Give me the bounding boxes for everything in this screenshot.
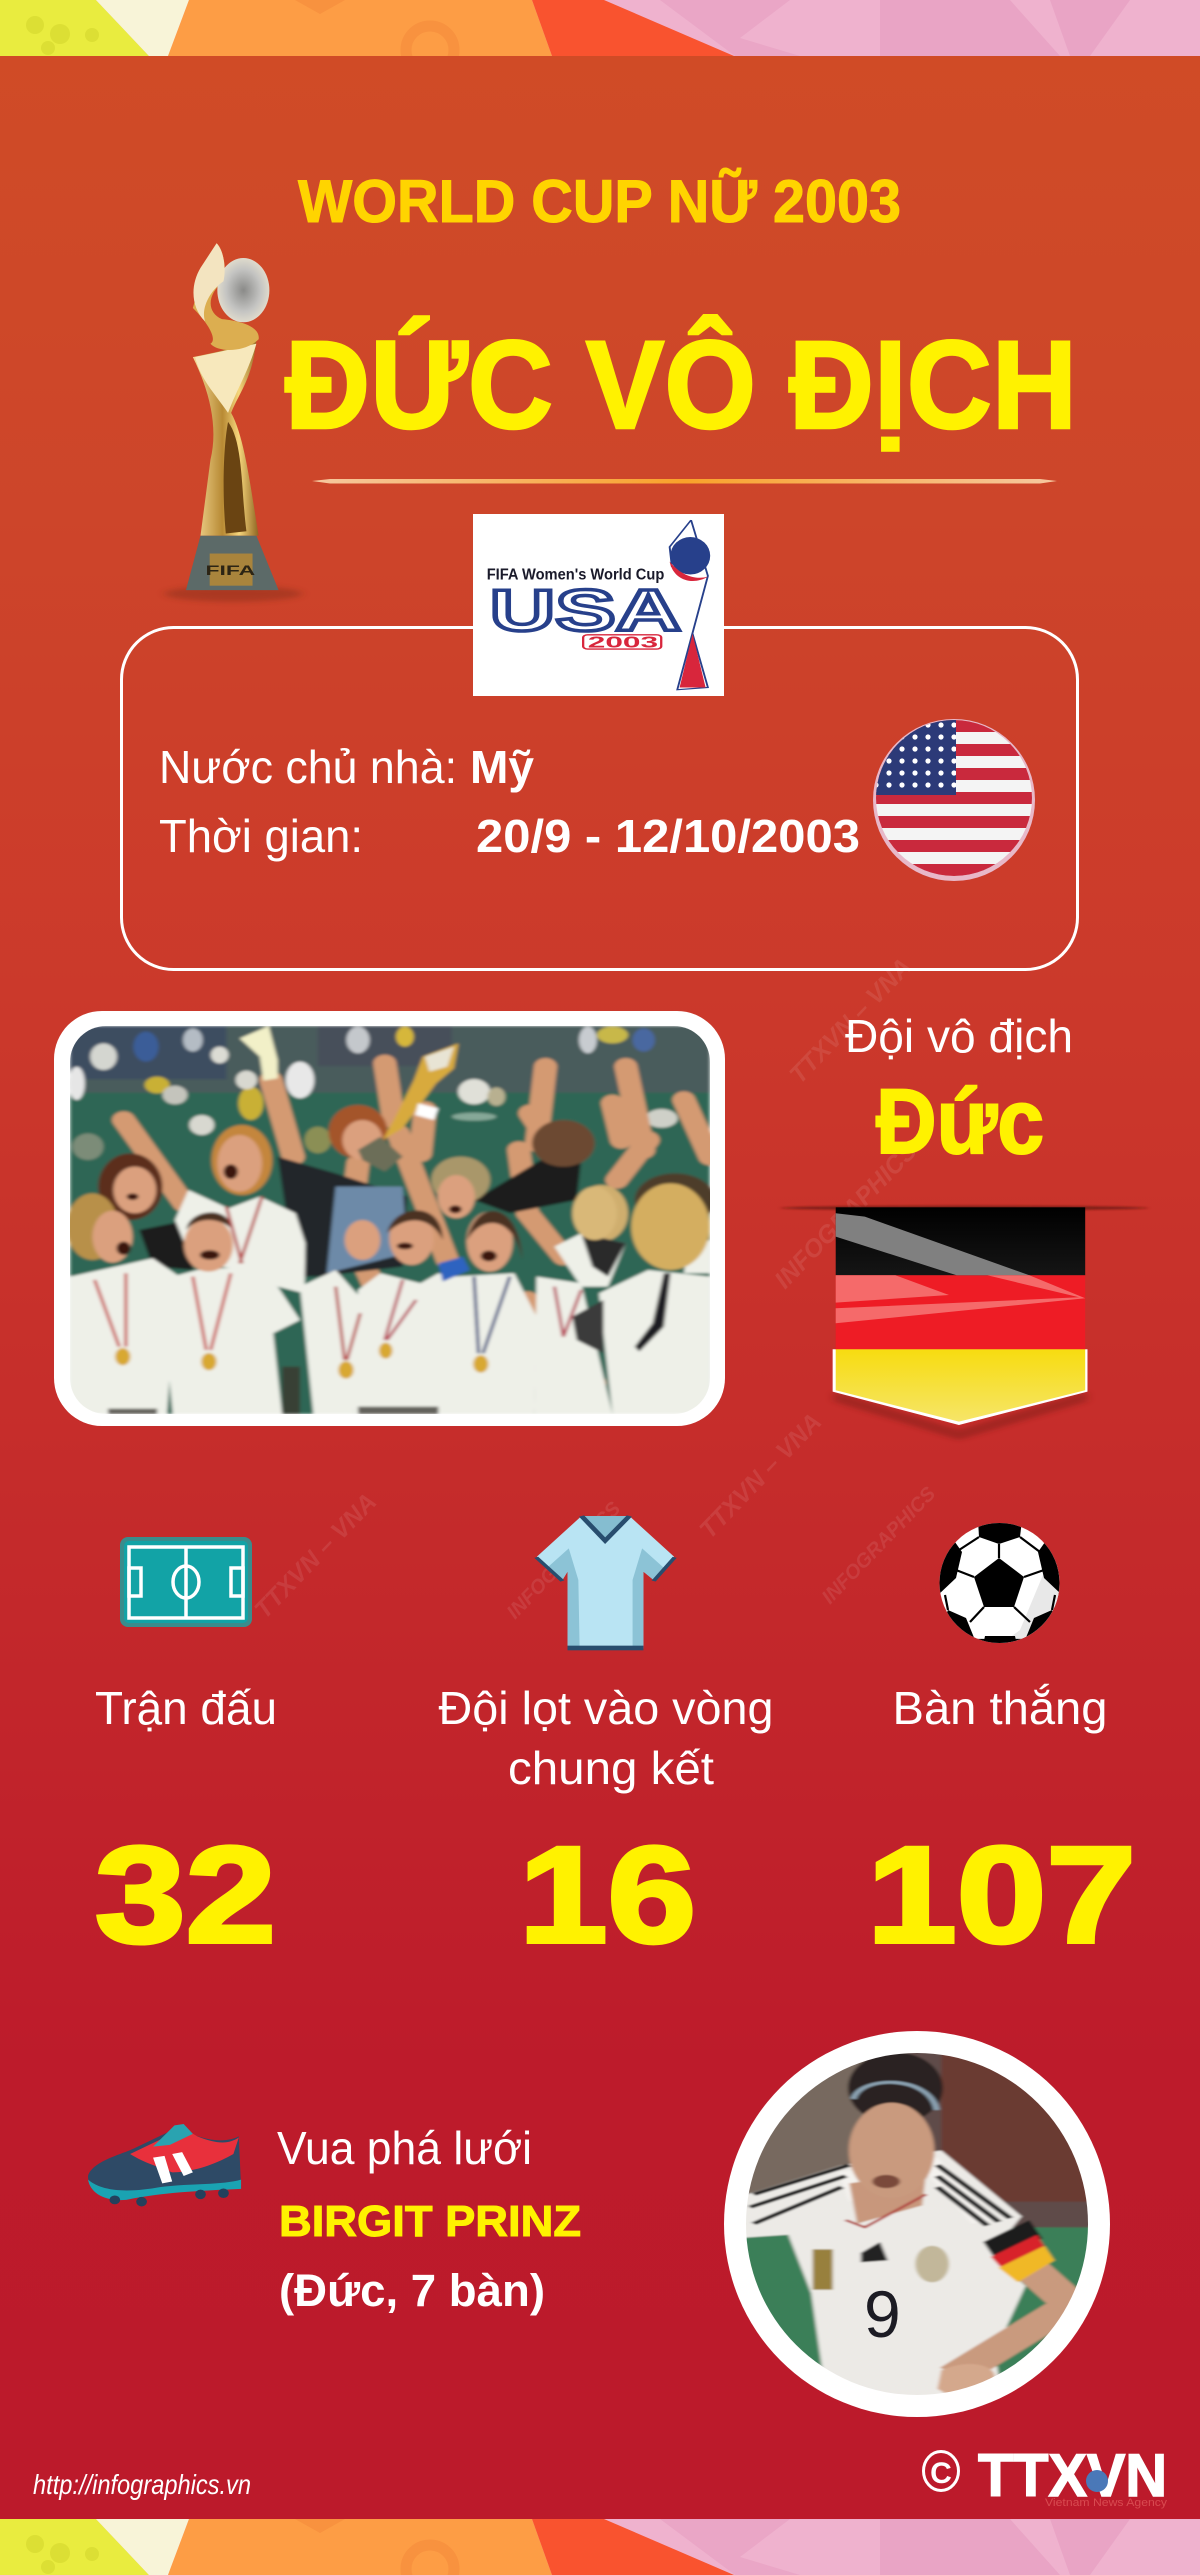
- top scorer name: BIRGIT PRINZ: [279, 2197, 581, 2246]
- top scorer details: (Đức, 7 bàn): [279, 2265, 545, 2316]
- dates line: [159, 810, 860, 862]
- stat number: 107 goals: 107: [867, 1819, 1136, 1972]
- arm and armband: [957, 2264, 1071, 2374]
- watermarks: TTXVN – VNA: [694, 1408, 827, 1544]
- icon: USA 2003 event logo: 2003: [588, 633, 658, 651]
- icon: Germany flag pennant: [781, 1206, 1148, 1440]
- arms raised: [124, 1063, 710, 1383]
- stat label: teams in finals: [438, 1682, 774, 1794]
- hair and dark shirts: [278, 1157, 407, 1277]
- icon: USA 2003 event logo: FIFA Women's World Cup: [487, 565, 664, 583]
- bottom decorative banner: [0, 2519, 1200, 2575]
- watermarks: TTXVN – VNA: [784, 953, 917, 1089]
- icon: USA flag circle: [870, 715, 1040, 885]
- icon: football boot: [88, 2124, 241, 2206]
- dates line: 20/9 - 12/10/2003: [476, 810, 860, 862]
- mouths: [117, 1164, 497, 1261]
- panel: Birgit Prinz portrait: 9: [864, 2277, 901, 2351]
- watermarks: [249, 953, 941, 1624]
- panel: host info: [122, 628, 1078, 970]
- icon: USA 2003 event logo: [473, 514, 724, 696]
- source url: http://infographics.vn: [33, 2469, 251, 2500]
- shoulder stripes: [750, 2165, 1010, 2226]
- title: Đức vô địch: ĐỨC VÔ ĐỊCH: [285, 316, 1077, 455]
- top decorative banner: [0, 0, 1200, 56]
- icon: women's world cup trophy: FIFA: [205, 563, 256, 578]
- icon: women's world cup trophy: [165, 243, 302, 602]
- stat label: teams in finals: Đội lọt vào vòng: [438, 1682, 774, 1734]
- logo: TTXVN copyright: TTXVN: [978, 2442, 1167, 2509]
- label: champion team: Đội vô địch: [845, 1010, 1073, 1062]
- logo: TTXVN copyright: Vietnam News Agency: [1045, 2497, 1168, 2509]
- stat number: 16 teams: 16: [519, 1819, 696, 1972]
- divider line: [312, 479, 1057, 484]
- label: top scorer: Vua phá lưới: [277, 2122, 532, 2174]
- trophy in photo: [383, 1043, 458, 1140]
- host country line: Nước chủ nhà:: [159, 741, 457, 793]
- stat label: goals: Bàn thắng: [892, 1682, 1108, 1734]
- jersey: [735, 2150, 1026, 2400]
- faces: [113, 1120, 475, 1218]
- watermarks: INFOGRAPHICS: [769, 1137, 923, 1294]
- glove: [240, 1026, 278, 1081]
- icon: USA 2003 event logo: USA: [490, 578, 681, 643]
- stat number: 32 matches: 32: [95, 1819, 276, 1972]
- panel: team celebration photo: [54, 1011, 725, 1426]
- chest details: [861, 2242, 888, 2262]
- watermarks: INFOGRAPHICS: [818, 1482, 941, 1608]
- panel: Birgit Prinz portrait: [724, 2031, 1110, 2417]
- dates line: Thời gian:: [159, 810, 363, 862]
- icon: shirt: [536, 1516, 675, 1650]
- neck and face: [848, 2180, 927, 2224]
- stat label: matches: Trận đấu: [95, 1682, 277, 1734]
- stat label: teams in finals: chung kết: [508, 1742, 714, 1794]
- icon: soccer ball: [940, 1523, 1060, 1643]
- crowd spots: [69, 1027, 678, 1160]
- watermarks: TTXVN – VNA: [249, 1488, 382, 1624]
- white shirts: [70, 1190, 710, 1414]
- watermarks: INFOGRAPHICS: [503, 1497, 626, 1623]
- icon: football pitch: [120, 1537, 252, 1627]
- logo: TTXVN copyright: C: [930, 2457, 952, 2490]
- title: World Cup nữ 2003: WORLD CUP NỮ 2003: [298, 168, 901, 235]
- medals: [95, 1197, 581, 1360]
- champion name: Đức: Đức: [876, 1071, 1044, 1173]
- host country line: Mỹ: [470, 741, 534, 793]
